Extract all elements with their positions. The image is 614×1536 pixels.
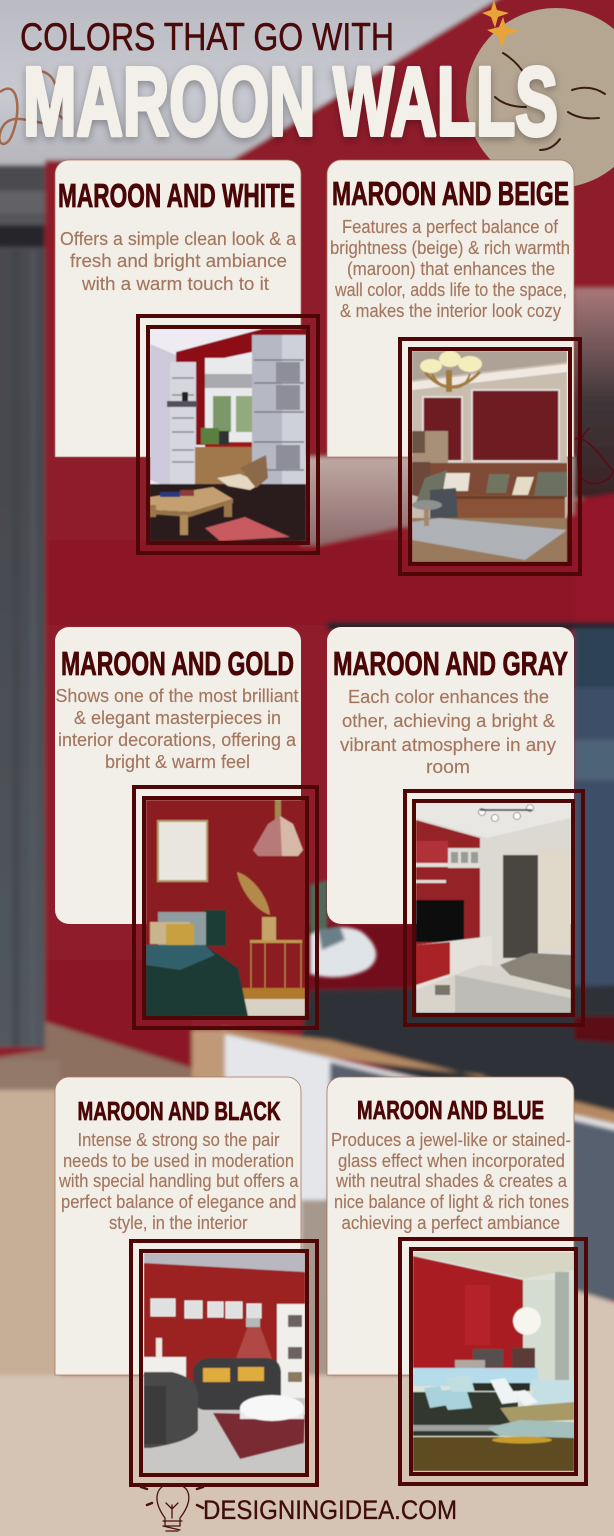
photo: living room with red wall and tv unit bbox=[416, 803, 571, 1013]
body text bbox=[58, 1129, 299, 1233]
body text: & makes the interior look cozy bbox=[340, 300, 562, 321]
body text: & elegant masterpieces in bbox=[74, 707, 281, 728]
body text: other, achieving a bright & bbox=[342, 710, 556, 731]
heading: MAROON AND BLUE bbox=[357, 1095, 544, 1125]
image frame bbox=[138, 316, 318, 553]
body text: fresh and bright ambiance bbox=[70, 250, 287, 271]
heading: MAROON AND WHITE bbox=[58, 177, 295, 214]
heading: MAROON AND BLACK bbox=[78, 1096, 281, 1126]
panel: maroon and white bbox=[55, 160, 318, 553]
body text: brightness (beige) & rich warmth bbox=[330, 237, 570, 258]
panel: maroon and gray bbox=[327, 627, 583, 1025]
image frame bbox=[400, 339, 580, 574]
panel: maroon and blue bbox=[327, 1077, 586, 1484]
image frame bbox=[134, 787, 317, 1028]
title bbox=[20, 16, 558, 156]
title line: colors that go with: COLORS THAT GO WITH bbox=[20, 16, 394, 59]
body text: Each color enhances the bbox=[348, 686, 549, 707]
icon: light bulb bbox=[141, 1484, 203, 1531]
panel: maroon and beige bbox=[327, 160, 580, 574]
image frame bbox=[131, 1241, 317, 1485]
heading: MAROON AND GOLD bbox=[61, 645, 294, 682]
decoration: orange star bbox=[482, 0, 520, 48]
body text: with neutral shades & creates a bbox=[335, 1170, 568, 1191]
body text bbox=[60, 228, 297, 294]
photo: living room with maroon wall and bookcases bbox=[150, 329, 306, 541]
background: white flowers with green plant bbox=[310, 880, 376, 977]
card background bbox=[55, 1077, 301, 1375]
body text: needs to be used in moderation bbox=[63, 1150, 294, 1171]
body text: Produces a jewel-like or stained- bbox=[331, 1129, 571, 1150]
card background bbox=[327, 160, 574, 457]
body text: Features a perfect balance of bbox=[342, 216, 559, 237]
body text: room bbox=[426, 756, 470, 777]
body text: bright & warm feel bbox=[105, 751, 250, 772]
body text: achieving a perfect ambiance bbox=[342, 1212, 560, 1233]
body text: perfect balance of elegance and bbox=[61, 1191, 296, 1212]
panel: maroon and gold bbox=[55, 627, 317, 1028]
decoration: maroon loop on right bbox=[568, 428, 612, 483]
body text: nice balance of light & rich tones bbox=[334, 1191, 569, 1212]
footer: brand logo bbox=[141, 1484, 457, 1531]
decoration: beige circle with sleeping face bbox=[466, 8, 614, 188]
photo: bedroom with maroon wall and gold accents bbox=[146, 800, 305, 1016]
body text: glass effect when incorporated bbox=[338, 1150, 565, 1171]
body text: wall color, adds life to the space, bbox=[334, 279, 567, 300]
image frame bbox=[400, 1239, 586, 1484]
body text: vibrant atmosphere in any bbox=[340, 734, 557, 755]
image frame bbox=[405, 791, 583, 1025]
photo: living room with gray sofas and red wall bbox=[144, 1253, 305, 1472]
body text: with a warm touch to it bbox=[81, 273, 269, 294]
body text: interior decorations, offering a bbox=[58, 729, 297, 750]
brand text: DESIGNINGIDEA.COM bbox=[203, 1495, 457, 1525]
body text: Shows one of the most brilliant bbox=[56, 685, 298, 706]
card background bbox=[55, 160, 301, 457]
body text: Intense & strong so the pair bbox=[78, 1129, 280, 1150]
body text bbox=[330, 216, 570, 321]
body text: with special handling but offers a bbox=[58, 1170, 299, 1191]
card background bbox=[327, 1077, 574, 1375]
card background bbox=[327, 627, 574, 924]
body text: style, in the interior bbox=[109, 1212, 248, 1233]
body text bbox=[56, 685, 298, 772]
photo: living room with glossy red wall and blue pillows bbox=[413, 1252, 574, 1471]
body text: Offers a simple clean look & a bbox=[60, 228, 297, 249]
photo: maroon wall panels with brown sofa and chandelier bbox=[412, 351, 567, 562]
decoration: brown squiggle bbox=[0, 72, 70, 144]
body text: (maroon) that enhances the bbox=[347, 258, 555, 279]
body text bbox=[331, 1129, 571, 1233]
card background bbox=[55, 627, 301, 924]
body text bbox=[340, 686, 557, 777]
panel: maroon and black bbox=[55, 1077, 317, 1485]
